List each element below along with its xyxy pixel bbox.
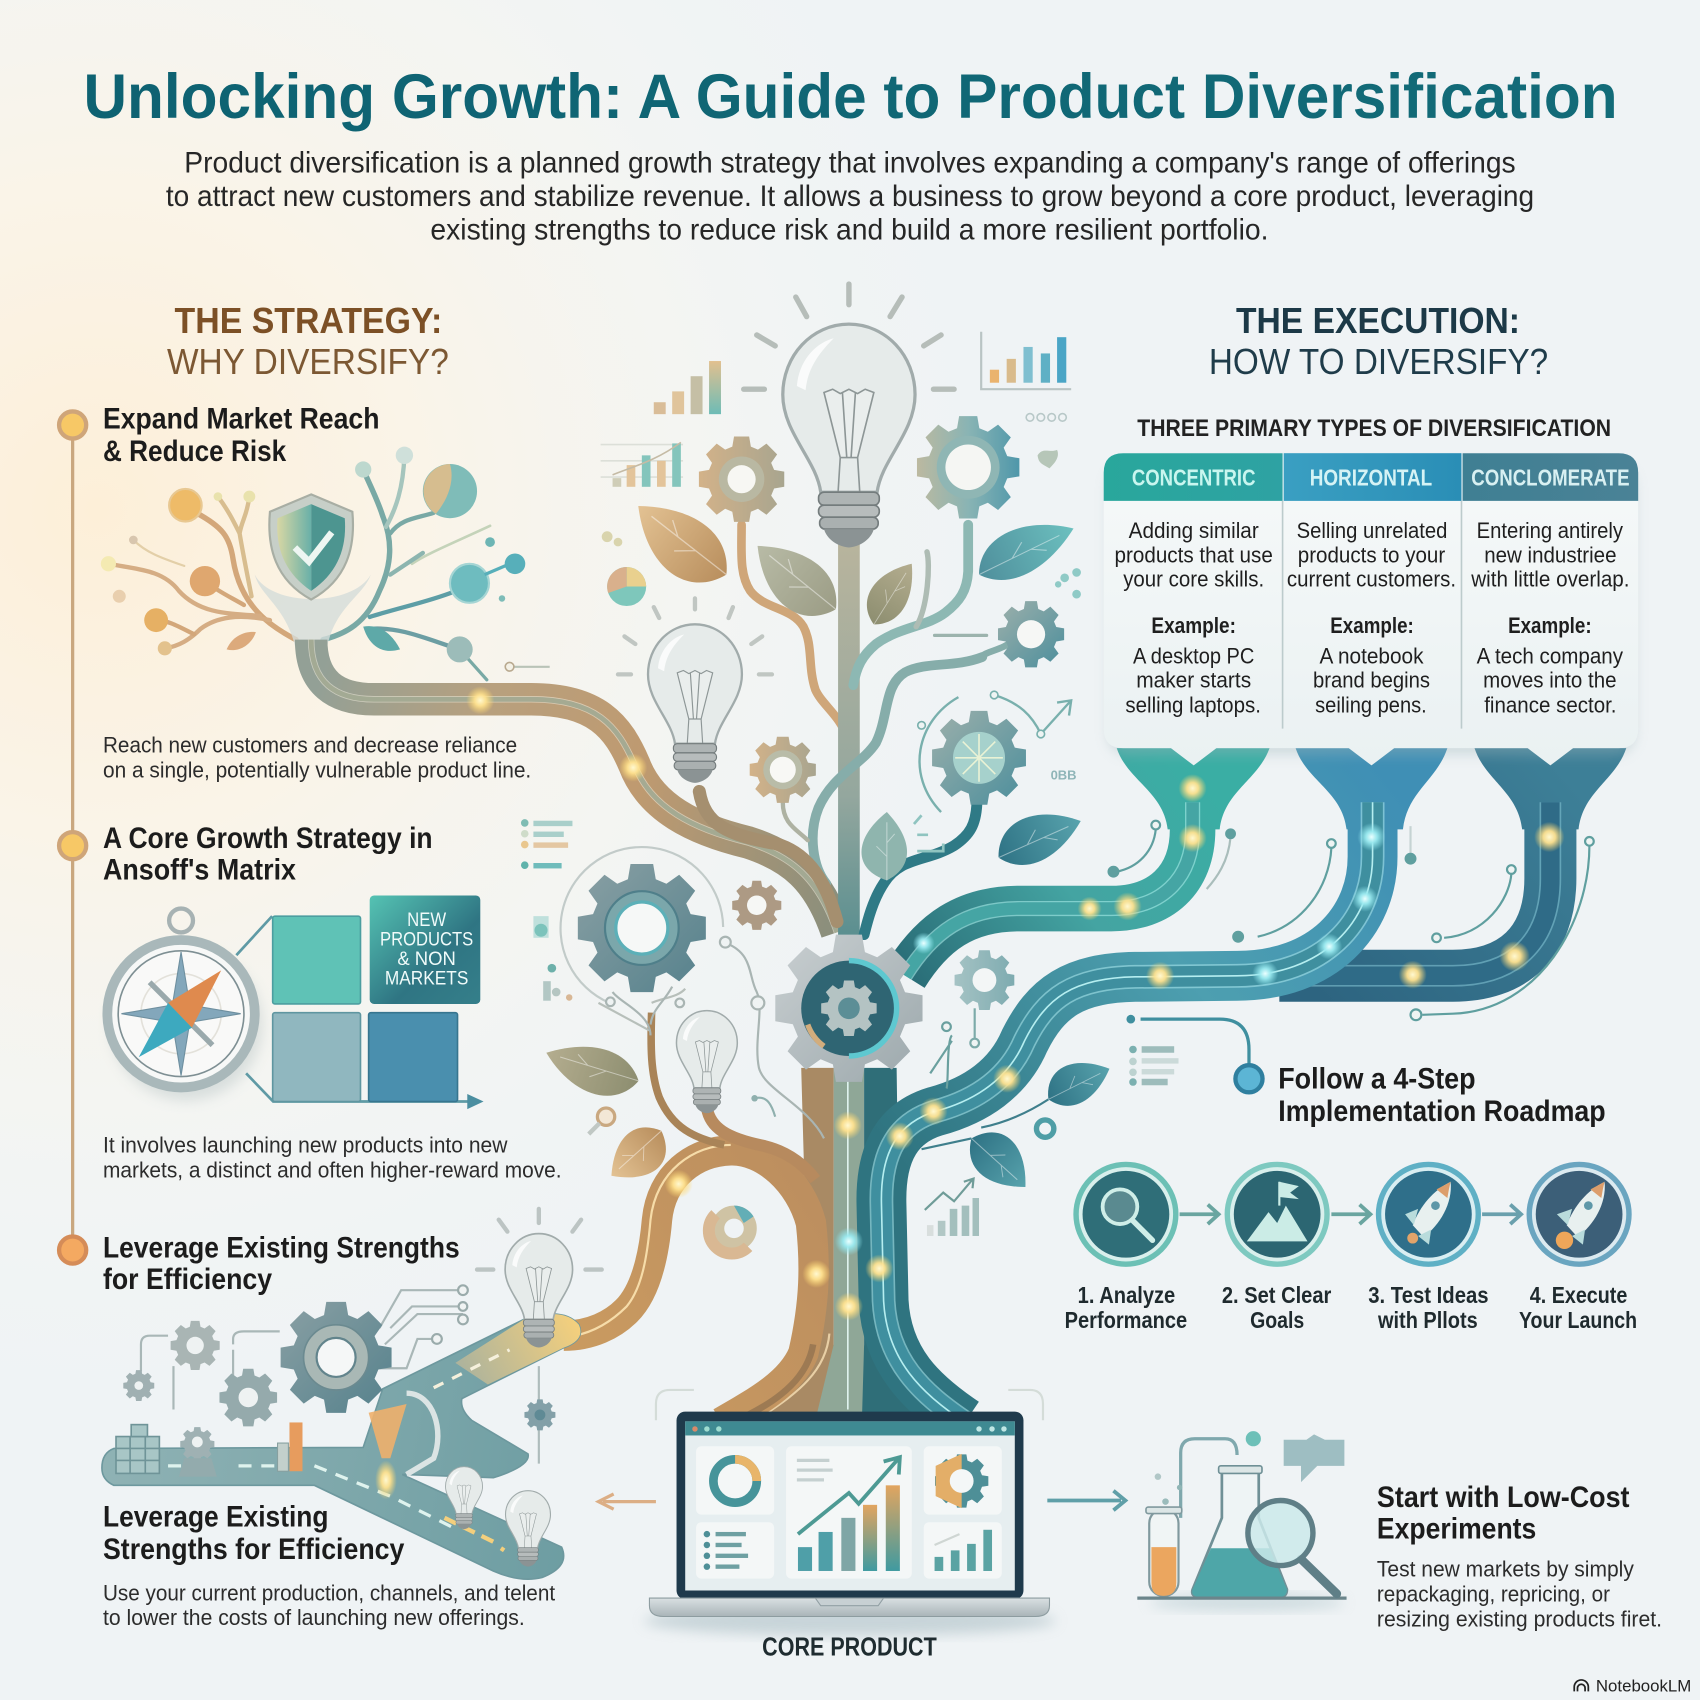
branch: orange stem to tan gear: [741, 525, 847, 737]
roadmap heading: Implementation Roadmap: [1278, 1096, 1606, 1128]
thin circuit connectors right: [1109, 821, 1594, 1020]
branch: small lower bulb stems: [598, 989, 815, 1180]
teal branches: [323, 455, 490, 680]
column: conglomerate: finance sector.: [1484, 692, 1617, 717]
bar chart card: [786, 1446, 912, 1579]
step 3 icon: rocket: [1379, 1164, 1478, 1264]
left branch from shield to trunk: [311, 640, 837, 932]
branch A: concentric: [905, 748, 1270, 976]
column: concentric: selling laptops.: [1125, 692, 1261, 717]
column: conglomerate: Example:: [1508, 613, 1592, 638]
roadmap connector: [1126, 1015, 1263, 1092]
heading: the execution: [1209, 301, 1548, 382]
right low-cost experiment text: Test new markets by simply: [1377, 1556, 1635, 1581]
gear: teal with hub: 0BB: [1051, 768, 1077, 783]
funnel glow: [369, 1404, 407, 1458]
heading: the strategy: WHY DIVERSIFY?: [167, 342, 449, 382]
right low-cost experiment text: Start with Low-Cost: [1377, 1482, 1630, 1514]
column: horizontal: products to your: [1298, 543, 1446, 568]
base: [649, 1598, 1049, 1617]
gear: big left: [561, 847, 723, 1003]
left item 3 text: Strengths for Efficiency: [103, 1534, 405, 1566]
right low-cost experiment text: repackaging, repricing, or: [1377, 1581, 1611, 1606]
branch: lower left orange to road bulb: [564, 1145, 814, 1422]
left item 2 heading: [103, 823, 433, 886]
left item 3 heading: Leverage Existing Strengths: [103, 1233, 460, 1265]
roadmap step labels: 1. Analyze: [1078, 1282, 1175, 1308]
gear: small near bulb: [750, 737, 816, 803]
chart: left small: [601, 442, 683, 487]
gear: large teal top right: [917, 416, 1019, 518]
list card: [696, 1522, 774, 1579]
small bulbs: [446, 1467, 483, 1529]
chart: top left bars: [654, 361, 721, 414]
left item 2 body: [103, 1132, 562, 1182]
roadmap step labels: 3. Test Ideas: [1368, 1282, 1489, 1308]
column: concentric: [1104, 453, 1283, 717]
left item 2 body: markets, a distinct and often higher-reward move.: [103, 1157, 562, 1182]
column: concentric: your core skills.: [1123, 567, 1264, 592]
left item 1 body: on a single, potentially vulnerable product line.: [103, 757, 531, 782]
bulb: above road: [477, 1209, 602, 1348]
callout: new products and non markets: NEW: [407, 910, 446, 931]
left item 1 heading: [103, 403, 379, 468]
test tube: [1146, 1507, 1182, 1596]
column: horizontal: brand begins: [1313, 667, 1430, 692]
column: conglomerate: moves into the: [1483, 667, 1617, 692]
table card: three types: [1104, 453, 1638, 765]
left item 1 body: [103, 732, 531, 782]
roadmap heading: [1278, 1064, 1606, 1128]
gear: teal with hub: [918, 691, 1077, 812]
callout: new products and non markets: [370, 896, 480, 1004]
arrow: left from laptop: [598, 1494, 656, 1509]
column: conglomerate: new industriee: [1484, 543, 1617, 568]
left item 3 heading: [103, 1233, 460, 1296]
step 4 icon: rocket launch: [1529, 1164, 1629, 1264]
left item 1 heading: & Reduce Risk: [103, 436, 287, 468]
bulb: small lower: [676, 1011, 737, 1113]
gear: light teal right: [955, 950, 1014, 1047]
intro paragraph: to attract new customers and stabilize revenue. It allows a business to grow beyond a core product, leveraging: [166, 181, 1534, 213]
column: concentric: CONCENTRIC: [1132, 465, 1255, 491]
column: horizontal: Example:: [1330, 613, 1414, 638]
chart: trunk right: [925, 1179, 979, 1236]
icon: shield tree: [101, 447, 550, 680]
laptop: core product: [644, 1390, 1056, 1636]
chart: top right: [981, 332, 1071, 389]
gear: tan top left: [699, 437, 784, 522]
callout: new products and non markets: & NON: [397, 949, 456, 970]
mini chart card: [924, 1522, 1002, 1579]
left item 3 text: Use your current production, channels, and telent: [103, 1580, 556, 1605]
column: horizontal: A notebook: [1319, 644, 1424, 669]
leaves on tree: [539, 486, 1117, 1202]
left item 2 heading: Ansoff's Matrix: [103, 854, 297, 886]
magnifier: [1248, 1501, 1337, 1594]
branch B: horizontal: [881, 748, 1447, 1422]
small gear right: [538, 1366, 540, 1464]
column: conglomerate: A tech company: [1477, 644, 1624, 669]
right low-cost experiment text: Experiments: [1377, 1513, 1536, 1545]
donut card: [696, 1446, 774, 1515]
heading: the execution: HOW TO DIVERSIFY?: [1209, 342, 1548, 382]
bars: [278, 1443, 288, 1471]
bulb: large top: [744, 284, 954, 548]
roadmap step labels: Performance: [1065, 1307, 1187, 1333]
column: concentric: Example:: [1151, 613, 1236, 638]
intro paragraph: Product diversification is a planned growth strategy that involves expanding a company's range of offerings: [184, 147, 1516, 179]
blocks: [116, 1425, 159, 1473]
shield: [269, 494, 353, 600]
column: conglomerate: CONCLOMERATE: [1471, 465, 1630, 491]
gear: small brown: [732, 881, 781, 930]
icon: compass: [107, 909, 262, 1100]
column: conglomerate: with little overlap.: [1470, 567, 1630, 592]
gear: small right: [998, 601, 1064, 667]
column: conglomerate: [1463, 453, 1638, 717]
heading: the strategy: [167, 301, 449, 382]
title: Unlocking Growth: A Guide to Product Diversification: [83, 62, 1618, 132]
arrow: right from laptop: [1047, 1491, 1125, 1510]
branch: thin stems to gears: [699, 525, 1014, 935]
step 2 icon: mountain flag: [1227, 1164, 1327, 1264]
arrow 1 to 2: [1180, 1205, 1219, 1224]
left item 1 body: Reach new customers and decrease reliance: [103, 732, 517, 757]
callout: new products and non markets: PRODUCTS: [380, 929, 473, 950]
arrow 3 to 4: [1482, 1205, 1521, 1224]
roadmap step labels: 4. Execute: [1530, 1282, 1627, 1308]
watermark: NotebookLM: NotebookLM: [1596, 1677, 1691, 1695]
trunk: [724, 1068, 974, 1420]
roadmap step labels: 2. Set Clear: [1222, 1282, 1331, 1308]
base line: [1137, 1597, 1347, 1600]
left item 2 heading: A Core Growth Strategy in: [103, 823, 433, 855]
timeline: [59, 411, 86, 1264]
arrow 2 to 3: [1331, 1205, 1370, 1224]
nodes: [169, 489, 202, 521]
column: horizontal: HORIZONTAL: [1310, 465, 1432, 491]
circuit lines: [141, 1290, 463, 1409]
roadmap step labels: Your Launch: [1519, 1307, 1637, 1333]
chart: pie: [607, 567, 646, 606]
left item 3 text: to lower the costs of launching new offerings.: [103, 1605, 525, 1630]
gear: centre: [775, 935, 923, 1082]
flask: [1192, 1466, 1287, 1597]
left item 2 body: It involves launching new products into new: [103, 1132, 508, 1157]
column: horizontal: Selling unrelated: [1297, 518, 1447, 543]
chat bubble: [1284, 1434, 1344, 1482]
callout: new products and non markets: MARKETS: [385, 968, 468, 989]
central stem: [838, 542, 860, 965]
road: [102, 1314, 580, 1579]
gears: [281, 1302, 392, 1413]
gear card: [924, 1446, 1002, 1515]
right low-cost experiment text: [1377, 1482, 1662, 1631]
bulb: medium: [618, 598, 772, 783]
circuit lines near centre: [606, 937, 952, 1138]
left item 3 heading: for Efficiency: [103, 1264, 273, 1296]
orange branches: [108, 497, 296, 648]
list icons: [1129, 1046, 1179, 1086]
icon: road with gears and bulbs: [102, 1285, 580, 1579]
column: horizontal: seiling pens.: [1315, 692, 1427, 717]
column: horizontal: current customers.: [1287, 567, 1456, 592]
label: core product: CORE PRODUCT: [762, 1632, 937, 1662]
column: horizontal: [1284, 453, 1461, 717]
roadmap step labels: [1065, 1282, 1637, 1333]
branch C: conglomerate: [1279, 748, 1626, 976]
Ansoff matrix: [236, 896, 484, 1109]
column: concentric: maker starts: [1136, 667, 1251, 692]
left item 3 text: [103, 1502, 556, 1630]
list icon left: [521, 819, 572, 869]
icon: lab flask and magnifier: [1137, 1431, 1347, 1611]
roadmap step labels: with Pllots: [1377, 1307, 1478, 1333]
roadmap step labels: Goals: [1250, 1307, 1304, 1333]
column: concentric: products that use: [1115, 543, 1273, 568]
intro paragraph: existing strengths to reduce risk and build a more resilient portfolio.: [430, 215, 1268, 247]
intro paragraph: [166, 147, 1534, 247]
left item 1 heading: Expand Market Reach: [103, 403, 379, 435]
step 1 icon: magnifier: [1076, 1164, 1176, 1264]
column: concentric: A desktop PC: [1133, 644, 1254, 669]
shield stem: [255, 575, 371, 651]
chart: donut: [709, 1206, 754, 1254]
heading: the execution: THE EXECUTION:: [1236, 301, 1520, 341]
column: conglomerate: Entering antirely: [1477, 518, 1624, 543]
table heading: THREE PRIMARY TYPES OF DIVERSIFICATION: [1137, 415, 1611, 442]
right low-cost experiment text: resizing existing products firet.: [1377, 1606, 1662, 1631]
small decorative icons: [533, 414, 1081, 1137]
left item 3 text: Leverage Existing: [103, 1502, 329, 1534]
roadmap heading: Follow a 4-Step: [1278, 1064, 1476, 1096]
column: concentric: Adding similar: [1129, 518, 1259, 543]
heading: the strategy: THE STRATEGY:: [175, 301, 442, 341]
glowing dots along branches: [466, 686, 1564, 1321]
